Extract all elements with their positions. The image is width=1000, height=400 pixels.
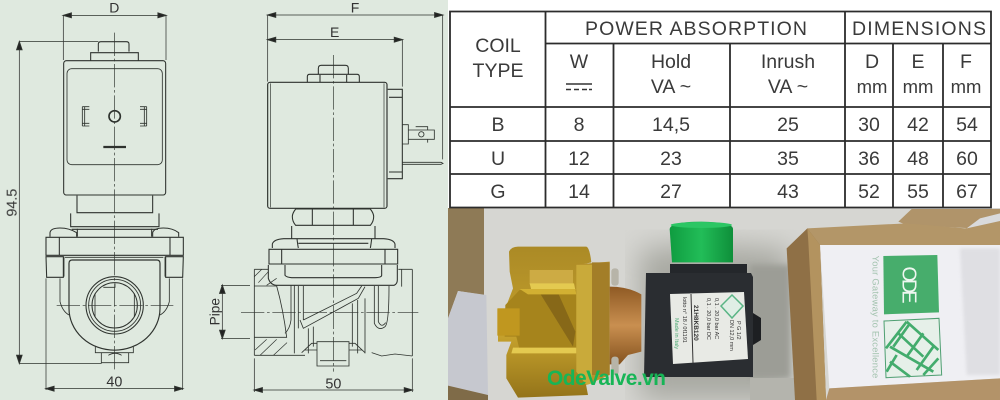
table header text — [473, 18, 986, 98]
DC symbol — [566, 84, 592, 90]
coil label: 0,1 . 20,0 bar DC — [705, 298, 711, 340]
cardboard box — [787, 209, 1000, 400]
coil top nut — [307, 65, 359, 82]
table header text: E — [911, 51, 925, 73]
table rows: 12 — [568, 148, 590, 170]
dimension E: E — [330, 24, 339, 40]
watermark: OdeValve.vn — [547, 367, 666, 390]
table rows: 8 — [574, 114, 584, 136]
dimension 50 — [254, 358, 412, 392]
table header text: VA ~ — [651, 76, 691, 98]
flange — [269, 226, 398, 264]
table rows: 43 — [777, 181, 799, 203]
valve body lower — [268, 265, 397, 285]
center lines — [57, 33, 173, 372]
dimension F: F — [351, 0, 359, 16]
copper neck and screws — [610, 268, 641, 375]
left cardboard and paper scraps — [448, 205, 488, 400]
side view drawing — [208, 0, 443, 392]
ODE leaflet branding: ODE — [898, 266, 920, 304]
table rows: 30 — [858, 114, 880, 136]
valve body — [69, 260, 160, 350]
coil earth bar — [103, 143, 126, 150]
cross section hatch — [254, 269, 287, 355]
ODE leaflet branding: Your Gateway to Excellence — [871, 256, 881, 378]
table header text: POWER ABSORPTION — [585, 18, 807, 40]
table header text: TYPE — [473, 60, 523, 82]
table rows: 54 — [956, 114, 978, 136]
table rows: 27 — [660, 181, 682, 203]
inlet port — [86, 277, 143, 334]
coil label: 21H8KB120 — [692, 305, 699, 341]
diaphragm bolts and flange — [46, 228, 183, 277]
product photo — [448, 205, 1000, 400]
table rows: 60 — [956, 148, 978, 170]
table header text: D — [865, 51, 879, 73]
table rows: B — [491, 114, 505, 136]
spade terminal — [402, 125, 443, 164]
center lines — [241, 55, 418, 372]
table rows: 23 — [660, 148, 682, 170]
bottom plug — [95, 347, 133, 363]
coil label: P G 1/2 — [735, 321, 741, 340]
table rows: 48 — [907, 148, 929, 170]
dimension F — [268, 0, 443, 159]
table rows: 52 — [858, 181, 880, 203]
table rows: 14,5 — [652, 114, 690, 136]
coil top nut — [91, 42, 138, 61]
table rows: 14 — [568, 181, 590, 203]
drawing background — [0, 0, 448, 400]
table header text: mm — [857, 76, 887, 97]
brass valve body — [497, 247, 610, 398]
green cap — [670, 222, 733, 262]
black coil — [644, 264, 761, 377]
specification table — [448, 0, 1000, 208]
coil label: Made in Italy — [673, 318, 679, 349]
table rows — [490, 114, 978, 203]
coil label: lotto n° 18 / 0f1191 — [681, 297, 687, 343]
table header text: Hold — [651, 51, 691, 73]
internal passage — [285, 285, 389, 353]
table header text: mm — [951, 76, 981, 97]
table grid — [450, 11, 991, 208]
table header text: mm — [903, 76, 933, 97]
dimension 94.5: 94.5 — [5, 189, 21, 217]
dimension D — [63, 0, 166, 60]
coil pins — [82, 107, 147, 126]
table rows: 67 — [956, 181, 978, 203]
dimension pipe — [208, 285, 250, 338]
coil centre hole — [109, 111, 120, 122]
table header text: F — [960, 51, 972, 73]
nut and stem — [71, 196, 159, 237]
coil label: 0,1 . 20,0 bar AC — [713, 298, 719, 339]
dimension 40: 40 — [106, 375, 122, 391]
dimension pipe: Pipe — [208, 298, 223, 325]
table header text: VA ~ — [768, 76, 808, 98]
table rows: U — [491, 148, 505, 170]
photo background — [448, 205, 1000, 400]
dimension 50: 50 — [325, 376, 341, 392]
table header text: W — [570, 51, 589, 73]
table header text: COIL — [475, 35, 521, 57]
connector block — [388, 89, 402, 179]
coil body — [268, 82, 387, 208]
ODE leaflet branding — [871, 255, 942, 378]
table rows: 35 — [777, 148, 799, 170]
dimension E — [268, 24, 402, 87]
table rows: 25 — [777, 114, 799, 136]
coil label — [670, 292, 748, 364]
hex nut — [292, 209, 374, 225]
dimension 40 — [46, 278, 183, 391]
table header text: DIMENSIONS — [852, 18, 986, 40]
coil body — [64, 61, 166, 195]
table rows: G — [490, 181, 506, 203]
dimension 94.5 — [5, 42, 102, 363]
coil label: DN 12,0 mm — [728, 320, 734, 351]
table rows: 55 — [907, 181, 929, 203]
table rows: 36 — [858, 148, 880, 170]
coil face — [67, 69, 162, 165]
table rows: 42 — [907, 114, 929, 136]
table header text: Inrush — [761, 51, 815, 73]
front view drawing — [5, 0, 183, 391]
bottom plug — [302, 342, 365, 366]
